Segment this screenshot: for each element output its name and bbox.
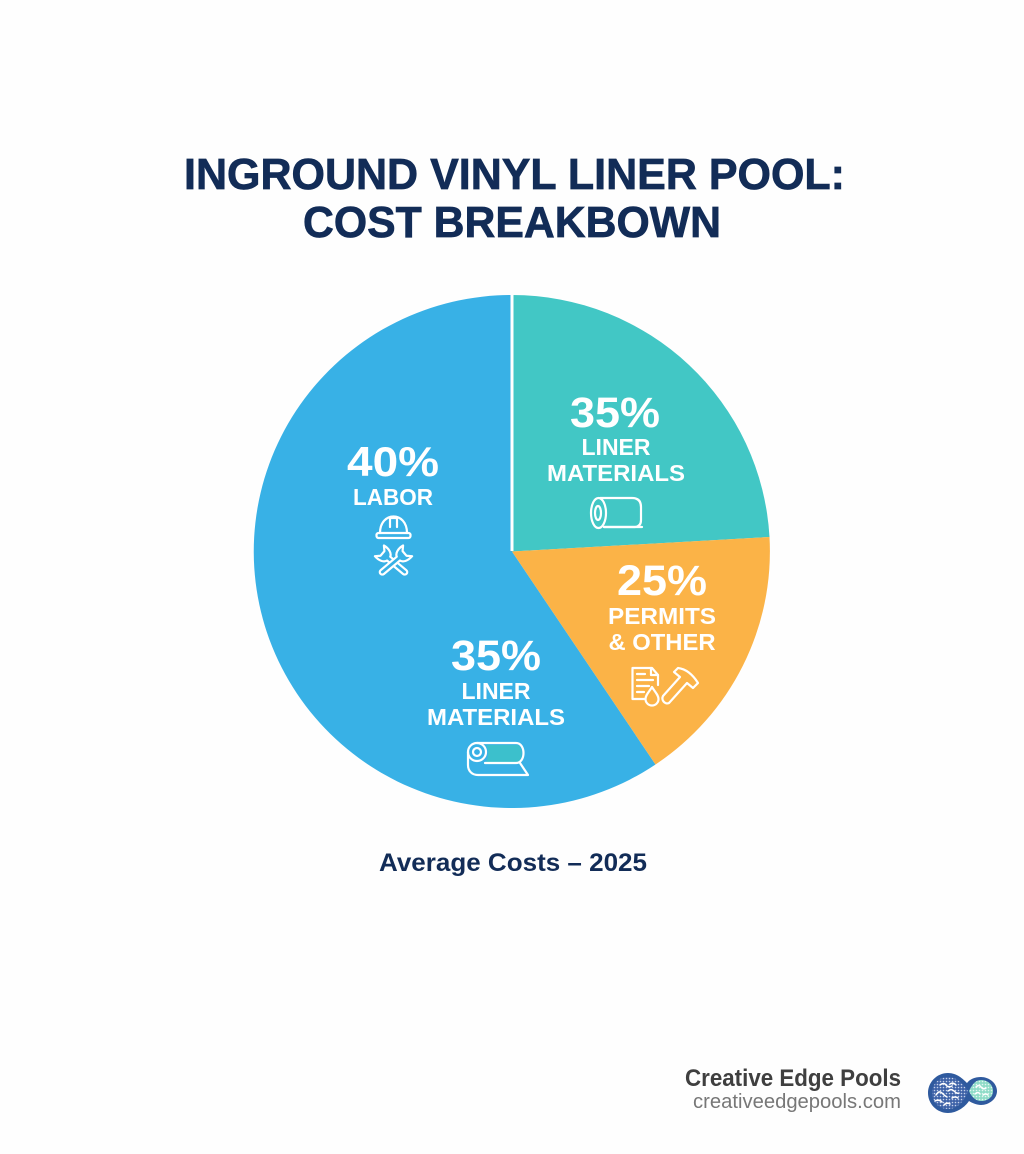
title: INGROUND VINYL LINER POOL: <box>184 151 845 199</box>
label: 25% permits and other: 25% <box>617 557 707 605</box>
icon: liner roll <box>591 498 642 528</box>
label: 35% liner materials (teal): LINER <box>582 434 651 460</box>
title: COST BREAKBOWN <box>303 199 721 247</box>
slice: permits and other (orange) <box>512 537 770 764</box>
brand text: Creative Edge Pools <box>685 1065 901 1092</box>
caption: Average Costs – 2025 <box>379 849 647 877</box>
label: 25% permits and other: PERMITS <box>608 603 716 629</box>
label: 35% liner materials (blue): 35% <box>451 632 541 680</box>
label: 35% liner materials (teal): MATERIALS <box>547 460 685 486</box>
brand text: creativeedgepools.com <box>693 1091 901 1113</box>
label: 25% permits and other: & OTHER <box>608 629 716 655</box>
label: 35% liner materials (blue): MATERIALS <box>427 704 565 730</box>
icon: unrolled liner <box>468 743 528 775</box>
title <box>184 151 845 247</box>
label: 40% labor: LABOR <box>353 484 433 510</box>
label: 40% labor: 40% <box>347 438 439 485</box>
label: 35% liner materials (teal) <box>547 389 685 486</box>
logo <box>928 1073 997 1113</box>
label: 35% liner materials (blue): LINER <box>462 678 531 704</box>
brand text <box>685 1065 901 1113</box>
label: 40% labor <box>347 438 439 510</box>
divider line <box>510 295 514 551</box>
label: 25% permits and other <box>608 557 716 655</box>
label: 35% liner materials (blue) <box>427 632 565 730</box>
slice: labor and liner materials (blue) <box>254 295 656 808</box>
pie chart <box>254 295 770 808</box>
icon: permit document, drop and hammer <box>632 668 698 706</box>
slice: liner materials (teal) <box>512 295 770 552</box>
label: 35% liner materials (teal): 35% <box>570 389 660 437</box>
icon: hard hat and crossed wrenches <box>375 516 412 579</box>
